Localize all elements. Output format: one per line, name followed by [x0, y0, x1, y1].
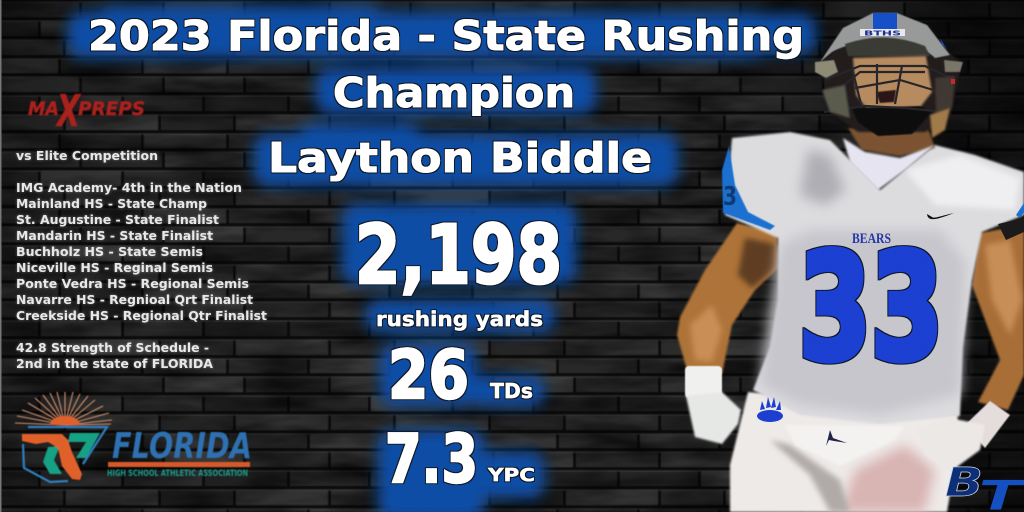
helmet bumper text: BTHS — [864, 30, 901, 38]
title line 3: player name: Laython Biddle — [268, 134, 652, 182]
right sleeve trim and band — [1016, 203, 1024, 218]
jersey shading — [760, 230, 966, 415]
mouth — [876, 90, 896, 103]
blond hair — [930, 108, 950, 138]
MaxPreps logo: MA — [28, 98, 59, 120]
right wrist tape — [965, 401, 1010, 448]
helmet dark interior — [820, 40, 962, 132]
left wrist tape — [685, 366, 722, 398]
icon: teal seven — [68, 433, 100, 458]
title line 1: 2023 Florida - State Rushing — [88, 12, 804, 60]
wordmark underline — [108, 462, 250, 467]
stat: rushing yards — [355, 209, 562, 331]
helmet — [815, 13, 963, 138]
competition list: 42.8 Strength of Schedule - — [16, 340, 209, 355]
competition list: IMG Academy- 4th in the Nation — [16, 180, 242, 195]
BT logo: B — [945, 460, 983, 506]
stat: yards per carry: 7.3 — [385, 420, 478, 498]
right arm — [972, 225, 1024, 410]
right arm highlight — [985, 240, 1022, 335]
icon: Florida state silhouette — [22, 434, 82, 480]
competition list: vs Elite Competition — [16, 148, 158, 163]
MaxPreps logo: X — [55, 86, 81, 137]
association name: HIGH SCHOOL ATHLETIC ASSOCIATION — [107, 469, 248, 479]
competition list: Niceville HS - Reginal Semis — [16, 260, 213, 275]
right fist — [917, 418, 985, 472]
icon: shield outline — [23, 427, 107, 482]
competition list: Mandarin HS - State Finalist — [16, 228, 213, 243]
competition list: Ponte Vedra HS - Regional Semis — [16, 276, 249, 291]
red chinstrap accent — [951, 79, 955, 84]
BT logo — [945, 460, 1024, 512]
stat: rushing yards: rushing yards — [376, 307, 543, 331]
jersey number: 33 — [799, 223, 943, 393]
competition list: Navarre HS - Regnioal Qrt Finalist — [16, 292, 253, 307]
jersey folds — [800, 150, 845, 205]
jersey — [725, 132, 1024, 424]
helmet shell — [820, 13, 950, 62]
icon: jumpman logo — [826, 430, 847, 446]
helmet front bumper — [860, 29, 905, 36]
left arm shading — [738, 238, 776, 288]
MaxPreps logo: PREPS — [78, 98, 145, 120]
sleeve number: 3 — [723, 182, 737, 212]
icon: sun — [50, 416, 80, 425]
stat: touchdowns: 26 — [388, 336, 469, 414]
football player photo illustration — [677, 13, 1024, 512]
face — [853, 56, 932, 110]
pants — [730, 392, 958, 512]
face mask chin area — [852, 106, 932, 136]
competition list: 2nd in the state of FLORIDA — [16, 356, 213, 371]
left arm — [677, 223, 778, 374]
left fist — [686, 392, 741, 444]
stat: yards per carry: YPC — [487, 465, 535, 486]
stat: touchdowns: TDs — [490, 379, 533, 403]
icon: swoosh — [927, 213, 954, 219]
blue paint behind headline and stats — [68, 6, 816, 512]
title line 2: Champion — [333, 69, 575, 117]
waist flap — [785, 425, 905, 466]
helmet blue stripe — [873, 13, 897, 29]
competition list: St. Augustine - State Finalist — [16, 212, 219, 227]
helmet blue rear accent — [940, 38, 948, 50]
title — [88, 12, 804, 182]
jersey upper highlight — [905, 155, 1020, 210]
competition list: Creekside HS - Regional Qtr Finalist — [16, 308, 267, 323]
helmet visor band — [845, 37, 930, 56]
neck — [848, 128, 935, 156]
Florida High School Athletic Association logo — [15, 392, 252, 482]
icon: bear paw — [757, 397, 783, 422]
competition list: Buchholz HS - State Semis — [16, 244, 203, 259]
competition list — [16, 148, 267, 371]
left sleeve blue trim — [722, 146, 775, 230]
face mask bars — [824, 64, 955, 112]
icon: teal crescent — [43, 446, 62, 474]
wordmark: FLORIDA — [112, 426, 252, 467]
MaxPreps logo — [28, 86, 145, 137]
left arm highlight — [690, 305, 722, 362]
helmet right side padding — [944, 60, 963, 72]
pants shadows — [840, 445, 935, 512]
stat: rushing yards: 2,198 — [355, 209, 562, 303]
neck gaiter — [843, 138, 935, 190]
helmet left side padding — [815, 60, 838, 78]
icon: sun rays — [15, 392, 112, 425]
competition list: Mainland HS - State Champ — [16, 196, 207, 211]
jersey name: BEARS — [852, 231, 891, 247]
stat: touchdowns — [388, 336, 533, 414]
